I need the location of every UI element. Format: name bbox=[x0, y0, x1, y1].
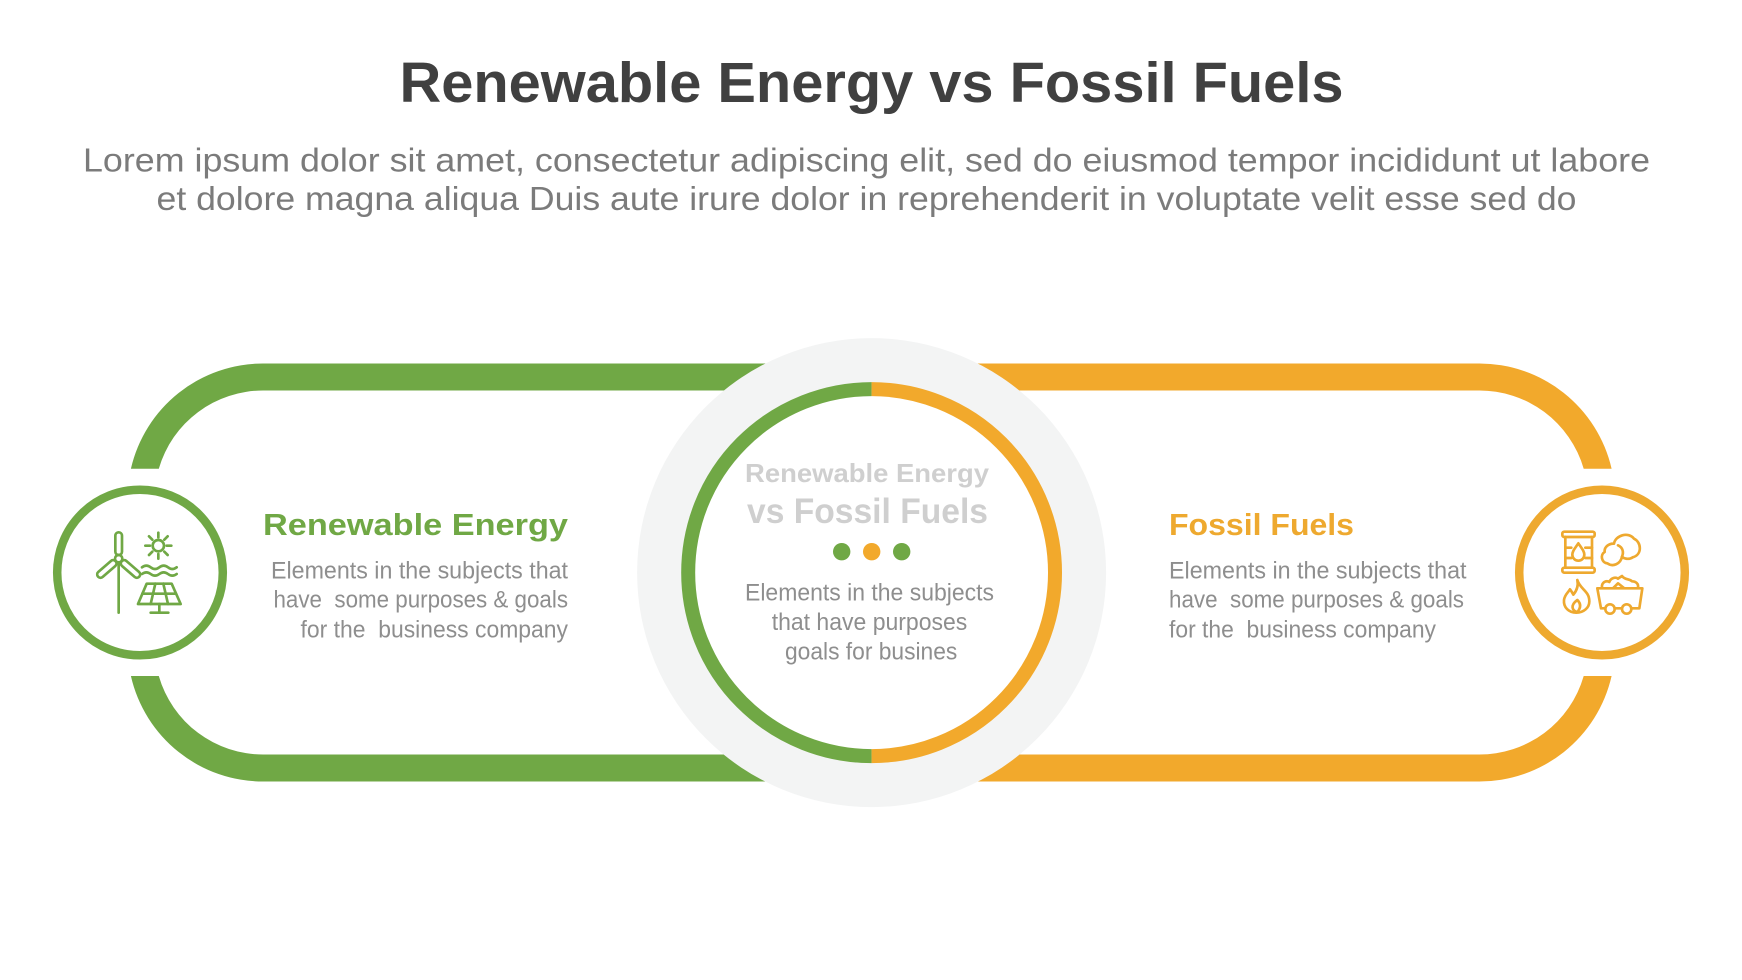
fossil fuels body text: have some purposes & goals bbox=[1169, 587, 1464, 614]
subtitle text block: Lorem ipsum dolor sit amet, consectetur adipiscing elit, sed do eiusmod tempor incididunt ut labore bbox=[83, 142, 1650, 178]
centre heading bbox=[745, 458, 990, 531]
centre dots bbox=[833, 543, 910, 560]
centre heading: Renewable Energy bbox=[745, 458, 990, 488]
fossil fuels heading: Fossil Fuels bbox=[1169, 507, 1354, 542]
centre body text: Elements in the subjects bbox=[745, 580, 994, 606]
renewable energy heading: Renewable Energy bbox=[263, 507, 569, 542]
fossil fuels body text: Elements in the subjects that bbox=[1169, 557, 1467, 584]
centre ring bbox=[688, 389, 1055, 756]
centre body text bbox=[745, 580, 994, 666]
panel: renewable energy outline band bbox=[131, 363, 820, 782]
subtitle text block bbox=[83, 142, 1650, 217]
centre body text: goals for busines bbox=[785, 638, 957, 666]
renewable energy body text bbox=[271, 557, 568, 643]
icon: wind turbine, sun, waves and solar panel bbox=[96, 532, 181, 613]
centre heading: vs Fossil Fuels bbox=[747, 492, 988, 531]
icon: oil barrel, smoke, flame and coal cart bbox=[1562, 532, 1642, 614]
icon circle: renewable energy bbox=[57, 490, 223, 655]
renewable energy body text: Elements in the subjects that bbox=[271, 557, 568, 584]
panel: fossil fuels outline band bbox=[922, 363, 1612, 782]
fossil fuels body text: for the business company bbox=[1169, 616, 1436, 643]
title: Renewable Energy vs Fossil Fuels bbox=[400, 51, 1344, 115]
renewable energy body text: have some purposes & goals bbox=[274, 587, 568, 614]
icon circle: fossil fuels bbox=[1519, 490, 1685, 655]
renewable energy body text: for the business company bbox=[300, 616, 568, 643]
subtitle text block: et dolore magna aliqua Duis aute irure dolor in reprehenderit in voluptate velit esse sed do bbox=[156, 180, 1576, 217]
centre body text: that have purposes bbox=[772, 609, 967, 636]
fossil fuels body text bbox=[1169, 557, 1467, 643]
centre backdrop circle bbox=[637, 338, 1106, 807]
